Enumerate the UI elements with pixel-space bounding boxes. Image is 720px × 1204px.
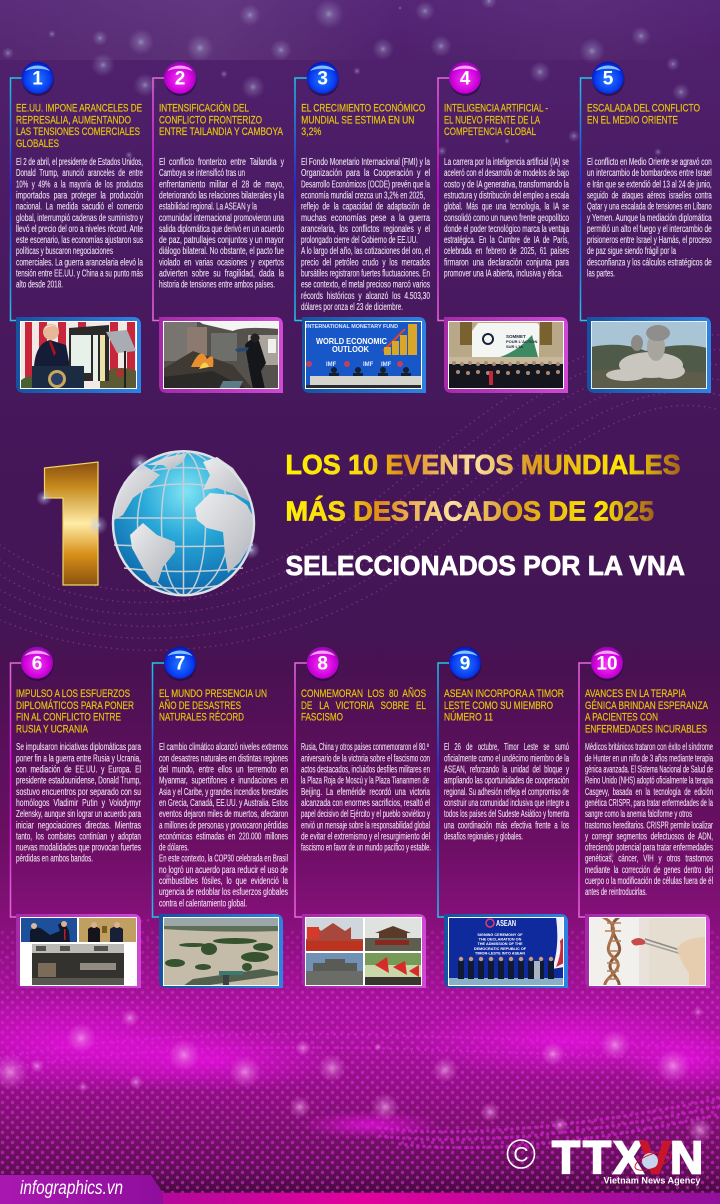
body text bbox=[301, 742, 431, 854]
body text: Donald Trump, anunció aranceles de entre bbox=[16, 168, 143, 179]
bracket bbox=[295, 78, 310, 320]
body text: récords históricos y alcanzó los 4.503,30 bbox=[301, 291, 430, 302]
body text: las partes. bbox=[587, 268, 615, 280]
body text: advierten sobre su fragilidad, dada la bbox=[159, 268, 284, 280]
bracket bbox=[10, 78, 25, 320]
body text: donde el poder tecnológico marca la ventaja bbox=[444, 224, 569, 235]
body text: Rusia, China y otros países conmemoraron el 80.º bbox=[301, 742, 429, 753]
number badge 10: 10 bbox=[596, 654, 618, 674]
body text: tanto, los combates continúan y adoptan bbox=[16, 831, 141, 842]
panel: event 10 bbox=[579, 647, 713, 988]
photo frame bbox=[585, 914, 710, 988]
body text bbox=[16, 157, 143, 291]
body text: salida diplomática que derivó en un acuerdo bbox=[159, 224, 284, 235]
heading: IMPULSO A LOS ESFUERZOS bbox=[16, 688, 130, 700]
body text: reflejo de la capacidad de adaptación de bbox=[301, 202, 430, 213]
heading: 3,2% bbox=[301, 126, 322, 138]
number badge 4 bbox=[449, 62, 482, 96]
heading: AVANCES EN LA TERAPIA bbox=[585, 688, 687, 700]
photo frame bbox=[587, 317, 711, 393]
photo: ASEAN signing ceremony: TIMOR-LESTE INTO ASEAN bbox=[475, 951, 525, 955]
photo: DNA and tweezers bbox=[589, 917, 706, 986]
body text: presidente estadounidense, Donald Trump, bbox=[16, 776, 141, 787]
heading: CONFLICTO FRONTERIZO bbox=[159, 114, 262, 126]
number badge 1: 1 bbox=[32, 68, 43, 90]
body text: poner fin a la guerra entre Rusia y Ucrania, bbox=[16, 753, 141, 764]
body text: de dólares. bbox=[159, 843, 189, 854]
title line 1: LOS 10 EVENTOS MUNDIALES bbox=[286, 449, 680, 480]
body text: deteriorando las relaciones bilaterales y la bbox=[159, 190, 284, 201]
body text: envió un mensaje sobre la responsabilidad global bbox=[301, 820, 430, 831]
number badge 7: 7 bbox=[175, 654, 185, 674]
photo frame bbox=[16, 317, 141, 393]
number badge 8: 8 bbox=[317, 654, 328, 674]
body text: aniversario de la victoria sobre el fascismo con bbox=[301, 753, 430, 764]
number badge 6 bbox=[21, 647, 54, 681]
body text: fascismo en favor de un mundo pacífico y estable. bbox=[301, 843, 431, 854]
body text: En este contexto, la COP30 celebrada en Brasil bbox=[159, 854, 288, 865]
body text: con mediación de EE.UU. y Europa. El bbox=[16, 764, 141, 776]
body text: economía mundial crezca un 3,2% en 2025, bbox=[301, 190, 425, 201]
body text: celebrada en febrero de 2025, 61 países bbox=[444, 246, 569, 257]
body text: El Fondo Monetario Internacional (FMI) y la bbox=[301, 157, 430, 168]
body text: nuevas modalidades que provocan fuertes bbox=[16, 843, 141, 854]
panel: event 5 bbox=[580, 62, 712, 393]
body text: económicas estimadas en 220.000 millones bbox=[159, 831, 288, 842]
body text: no logró un acuerdo para reducir el uso de bbox=[159, 865, 288, 876]
body text: iniciar negociaciones directas. Mientras bbox=[16, 820, 141, 831]
photo: parades collage bbox=[305, 917, 422, 986]
number badge 2: 2 bbox=[175, 68, 185, 90]
heading: REPRESALIA, AUMENTANDO bbox=[16, 114, 131, 126]
photo: smoke over hills bbox=[591, 321, 707, 389]
heading bbox=[444, 102, 548, 138]
title line 2: MÁS DESTACADOS DE 2025 bbox=[286, 496, 654, 526]
panel: event 2 bbox=[153, 62, 285, 393]
heading: FASCISMO bbox=[301, 712, 343, 724]
photo: world economic outlook panel: OUTLOOK bbox=[332, 345, 369, 354]
body text bbox=[301, 157, 430, 313]
photo frame bbox=[444, 317, 568, 393]
body text: papel decisivo del Ejército y el pueblo soviético y bbox=[301, 809, 430, 820]
body text: del mundo, entre ellos un terremoto en bbox=[159, 764, 288, 776]
number badge 4: 4 bbox=[460, 68, 471, 90]
photo: world economic outlook panel bbox=[305, 321, 422, 389]
number badge 2 bbox=[164, 62, 196, 96]
heading bbox=[444, 688, 564, 724]
subtitle: SELECCIONADOS POR LA VNA bbox=[286, 550, 685, 581]
body text bbox=[587, 157, 712, 280]
body text: Desarrollo Económicos (OCDE) prevén que la bbox=[301, 179, 430, 190]
photo frame bbox=[159, 317, 283, 393]
site name: infographics.vn bbox=[20, 1178, 123, 1199]
body text: combustibles fósiles, lo que evidenció la bbox=[159, 876, 288, 887]
photo: rubble and officer bbox=[163, 321, 279, 389]
body text: construir una comunidad inclusiva que integre a bbox=[444, 798, 569, 809]
heading: LESTE COMO SU MIEMBRO bbox=[444, 700, 553, 712]
photo: world economic outlook panel: INTERNATIONAL MONETARY FUND bbox=[306, 324, 398, 330]
body text: todos los países del Sudeste Asiático y fomenta bbox=[444, 809, 569, 820]
body text bbox=[159, 157, 285, 291]
body text: ampliando las oportunidades de cooperación bbox=[444, 776, 569, 787]
photo: AI summit group: SUR L'IA bbox=[506, 344, 523, 349]
heading: AÑO DE DESASTRES bbox=[159, 699, 241, 712]
body text: enfrentamiento militar el 28 de mayo, bbox=[159, 179, 284, 190]
body text: una coordinación más efectiva frente a los bbox=[444, 820, 569, 831]
body text: llevó el precio del oro a niveles récord. Ante bbox=[16, 224, 143, 235]
heading: FIN AL CONFLICTO ENTRE bbox=[16, 712, 121, 724]
body text: en Grecia, Canadá, EE.UU. y Australia. Estos bbox=[159, 798, 288, 809]
heading: MUNDIAL SE ESTIMA EN UN bbox=[301, 114, 414, 126]
body text: El 26 de octubre, Timor Leste se sumó bbox=[444, 742, 569, 753]
heading: RUSIA Y UCRANIA bbox=[16, 723, 89, 735]
photo: AI summit group bbox=[448, 321, 564, 389]
heading: EE.UU. IMPONE ARANCELES DE bbox=[16, 102, 142, 114]
photo: ASEAN signing ceremony: DEMOCRATIC REPUBLIC OF bbox=[474, 947, 527, 951]
photo frame bbox=[16, 914, 141, 988]
body text: a millones de personas y provocaron pérdidas bbox=[159, 820, 288, 831]
body text: firmaron una declaración conjunta para bbox=[444, 257, 569, 268]
body text: homólogos Vladimir Putin y Volodymyr bbox=[16, 798, 142, 809]
body text: alto desde 2018. bbox=[16, 280, 63, 291]
photo: ASEAN signing ceremony bbox=[448, 917, 564, 986]
body text: ASEAN, reforzando la unidad del bloque y bbox=[444, 764, 569, 776]
heading bbox=[301, 102, 425, 138]
hero: title section bbox=[36, 449, 685, 595]
heading bbox=[301, 687, 426, 724]
bracket bbox=[438, 663, 452, 917]
body text: desafíos regionales y globales. bbox=[444, 831, 523, 842]
bracket bbox=[10, 663, 25, 917]
number badge 5 bbox=[592, 62, 624, 96]
body text: Zelensky, aunque sin lograr un acuerdo para bbox=[16, 809, 141, 820]
photo: world economic outlook panel: IMF bbox=[381, 362, 392, 368]
copyright mark bbox=[508, 1140, 534, 1168]
heading: GLOBALES bbox=[16, 138, 59, 150]
body text: pérdidas en ambos bandos. bbox=[16, 854, 93, 865]
body text: promover una IA abierta, inclusiva y ética. bbox=[444, 268, 563, 280]
heading bbox=[159, 688, 267, 724]
body text: importados para proteger la producción bbox=[16, 190, 143, 201]
photo: ASEAN signing ceremony: SIGNING CEREMONY OF bbox=[477, 933, 523, 937]
body text: este escenario, las economías ajustaron sus bbox=[16, 235, 143, 246]
photo: world economic outlook panel: IMF bbox=[326, 362, 337, 368]
heading bbox=[16, 688, 134, 735]
globe bbox=[113, 451, 254, 595]
photo: flood aerial bbox=[163, 917, 279, 986]
body text: violado en varias ocasiones y expertos bbox=[159, 257, 284, 268]
body text: oficialmente como el undécimo miembro de la bbox=[444, 753, 569, 764]
agency logo: Vietnam News Agency bbox=[604, 1176, 701, 1186]
heading bbox=[16, 102, 142, 150]
heading: INTELIGENCIA ARTIFICIAL - bbox=[444, 102, 548, 114]
sparkle accents bbox=[36, 453, 260, 559]
heading: EL NUEVO FRENTE DE LA bbox=[444, 114, 541, 126]
body text: diálogo bilateral. No obstante, el pacto fue bbox=[159, 246, 284, 257]
body text: bursátiles registraron fuertes fluctuaciones. En bbox=[301, 268, 430, 280]
body text: tensión entre EE.UU. y China a su punto más bbox=[16, 268, 143, 280]
number badge 7 bbox=[164, 647, 196, 681]
number badge 6: 6 bbox=[32, 654, 42, 674]
body text: estabilidad regional. La ASEAN y la bbox=[159, 202, 257, 213]
panel: event 1 bbox=[10, 62, 143, 393]
heading bbox=[159, 102, 284, 138]
photo: AI summit group: POUR L'ACTION bbox=[506, 339, 538, 344]
heading: LAS TENSIONES COMERCIALES bbox=[16, 126, 140, 138]
body text: contra el calentamiento global. bbox=[159, 898, 247, 909]
body text: nacional. La medida sacudió el comercio bbox=[16, 202, 143, 213]
body text: políticas y buscaron negociaciones bbox=[16, 246, 113, 257]
heading: DE LA VICTORIA SOBRE EL bbox=[301, 700, 426, 712]
photo frame bbox=[444, 914, 568, 988]
body text: Organización para la Cooperación y el bbox=[301, 168, 430, 179]
heading: NATURALES RÉCORD bbox=[159, 711, 244, 724]
bracket bbox=[579, 663, 593, 917]
photo: ASEAN signing ceremony: THE ADMISSION OF THE bbox=[477, 942, 523, 946]
body text: El conflicto fronterizo entre Tailandia y bbox=[159, 157, 284, 168]
number badge 3: 3 bbox=[317, 68, 328, 90]
body text: Myanmar, supertifones e inundaciones en bbox=[159, 776, 288, 787]
number badge 10 bbox=[591, 647, 624, 681]
heading: ASEAN INCORPORA A TIMOR bbox=[444, 688, 564, 700]
heading: EN EL MEDIO ORIENTE bbox=[587, 114, 678, 126]
number badge 9 bbox=[449, 647, 482, 681]
number badge 5: 5 bbox=[603, 68, 614, 90]
bracket bbox=[580, 78, 595, 320]
bracket bbox=[153, 78, 168, 320]
panel: event 9 bbox=[438, 647, 569, 988]
body text: de evitar el extremismo y el resurgimiento del bbox=[301, 831, 430, 842]
body text: Se impulsaron iniciativas diplomáticas para bbox=[16, 742, 141, 753]
body text: ese contexto, el metal precioso marcó varios bbox=[301, 280, 430, 291]
body text: estructura y distribución del empleo a escala bbox=[444, 190, 569, 201]
footer bbox=[0, 1132, 720, 1204]
photo frame bbox=[302, 914, 426, 988]
body text: comerciales. La guerra arancelaria elevó la bbox=[16, 257, 143, 268]
body text: antes de reintroducirlas. bbox=[585, 887, 647, 898]
body text: consolidó como un nuevo frente geopolítico bbox=[444, 213, 569, 224]
body text: sostuvo encuentros por separado con su bbox=[16, 787, 141, 798]
heading bbox=[585, 688, 709, 735]
body text: historia de tensiones entre ambos países. bbox=[159, 280, 275, 291]
photo: ASEAN signing ceremony: THE DECLARATION ON bbox=[479, 938, 522, 942]
heading: COMPETENCIA GLOBAL bbox=[444, 126, 536, 138]
body text: arancelaria, los conflictos regionales y el bbox=[301, 224, 430, 235]
photo: AI summit group: SOMMET bbox=[506, 334, 526, 339]
body text: dólares por onza el 23 de diciembre. bbox=[301, 302, 403, 313]
body text: aceleró con el desarrollo de modelos de bajo bbox=[444, 168, 569, 179]
body text: de paz, patrullajes conjuntos y un mayor bbox=[159, 235, 285, 246]
heading: INTENSIFICACIÓN DEL bbox=[159, 102, 249, 114]
photo frame bbox=[302, 317, 426, 393]
number badge 8 bbox=[307, 647, 339, 681]
panel: event 6 bbox=[10, 647, 142, 988]
photo frame bbox=[159, 914, 283, 988]
number badge 9: 9 bbox=[460, 654, 470, 674]
heading: DIPLOMÁTICOS PARA PONER bbox=[16, 699, 134, 712]
bracket bbox=[152, 663, 168, 917]
copyright mark: C bbox=[513, 1144, 529, 1166]
body text: prolongado cierre del Gobierno de EE.UU. bbox=[301, 235, 418, 246]
body text: El cambio climático alcanzó niveles extremos bbox=[159, 742, 288, 753]
body text bbox=[444, 157, 569, 280]
number badge 3 bbox=[307, 62, 339, 96]
agency logo: TTXVN bbox=[552, 1132, 703, 1184]
panel: event 7 bbox=[152, 647, 288, 988]
heading: ENTRE TAILANDIA Y CAMBOYA bbox=[159, 126, 284, 138]
body text: estratégica. En la Cumbre de IA de París, bbox=[444, 235, 569, 246]
body text: 10% y 49% a la mayoría de los productos bbox=[16, 179, 143, 190]
body text bbox=[159, 742, 288, 909]
body text: comunidad internacional promovieron una bbox=[159, 213, 284, 224]
body text: La carrera por la inteligencia artificial (IA) se bbox=[444, 157, 569, 168]
bracket bbox=[438, 78, 452, 320]
body text bbox=[444, 742, 569, 842]
body text: muchas economías pese a la guerra bbox=[301, 213, 430, 224]
body text: eventos dejaron miles de muertos, afectaron bbox=[159, 809, 288, 820]
panel: event 3 bbox=[295, 62, 430, 393]
body text: actos destacados, incluidos desfiles militares en bbox=[301, 764, 430, 776]
number badge 1 bbox=[22, 62, 54, 96]
body text: Camboya se intensificó tras un bbox=[159, 168, 245, 179]
body text: global. Más que una tecnología, la IA se bbox=[444, 202, 569, 213]
body text: Asia y el Caribe, y grandes incendios forestales bbox=[159, 787, 288, 798]
numeral 1 bbox=[44, 462, 98, 585]
body text: precio del petróleo crudo y los mercados bbox=[301, 257, 430, 268]
panel: event 8 bbox=[295, 647, 431, 988]
heading: EL CRECIMIENTO ECONÓMICO bbox=[301, 102, 425, 114]
bracket bbox=[295, 663, 310, 917]
body text: A lo largo del año, las cotizaciones del oro, el bbox=[301, 246, 430, 257]
body text bbox=[585, 742, 713, 898]
body text: con desastres naturales en distintas regiones bbox=[159, 753, 288, 764]
heading: EL MUNDO PRESENCIA UN bbox=[159, 688, 267, 700]
body text: regional. Su adhesión refleja el compromiso de bbox=[444, 787, 569, 798]
body text: costo y de IA generativa, transformando la bbox=[444, 179, 569, 190]
body text: alcanzada con enormes sacrificios, resaltó el bbox=[301, 798, 430, 809]
body text: de paz sigue siendo frágil por la bbox=[587, 246, 676, 257]
footer band bbox=[0, 1193, 720, 1204]
photo: world economic outlook panel: IMF bbox=[363, 362, 374, 368]
body text bbox=[16, 742, 142, 865]
heading bbox=[587, 102, 700, 126]
photo: world economic outlook panel: WORLD ECONOMIC bbox=[316, 337, 387, 346]
photo: diplomacy collage bbox=[20, 917, 137, 986]
site tab bbox=[0, 1175, 163, 1204]
heading: CONMEMORAN LOS 80 AÑOS bbox=[301, 687, 426, 700]
body text: Beijing. La efeméride recordó una victoria bbox=[301, 787, 430, 798]
panel: event 4 bbox=[438, 62, 569, 393]
body text: urgencia de redoblar los esfuerzos globales bbox=[159, 887, 288, 898]
heading: A PACIENTES CON bbox=[585, 712, 658, 724]
body text: El 2 de abril, el presidente de Estados Unidos, bbox=[16, 157, 143, 168]
body text: global, interrumpió cadenas de suministro y bbox=[16, 213, 143, 224]
photo: ASEAN signing ceremony: ASEAN bbox=[496, 919, 516, 928]
heading: NÚMERO 11 bbox=[444, 711, 493, 724]
body text: la Plaza Roja de Moscú y la Plaza Tiananmen de bbox=[301, 776, 429, 787]
photo: president at podium bbox=[20, 321, 137, 389]
